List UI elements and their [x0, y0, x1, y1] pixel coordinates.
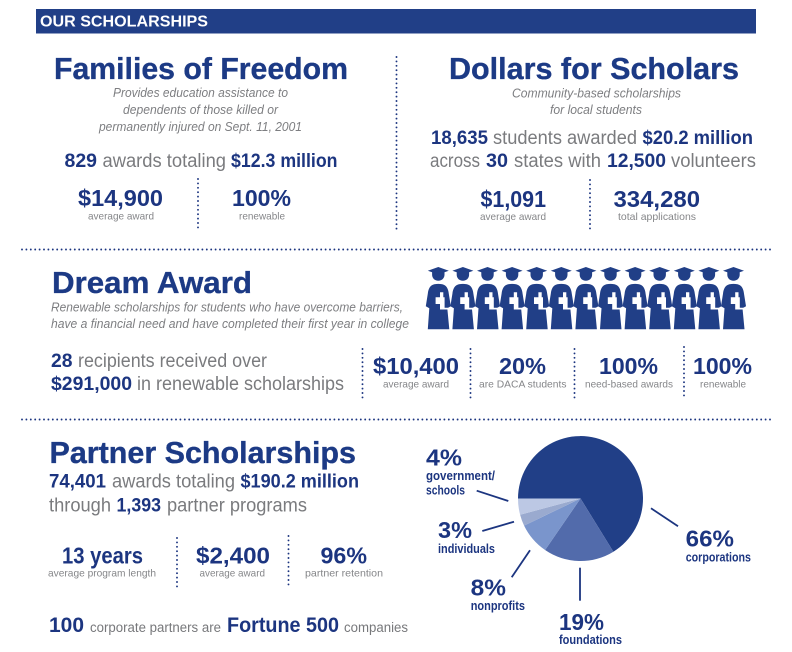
- pie label: 4% government/schools: 4%: [426, 445, 462, 471]
- stat lines: recipients: $291,000: [51, 374, 132, 395]
- stat lines: students and volunteers: students awarded: [493, 128, 637, 149]
- stat lines: partner awards: awards totaling: [112, 472, 235, 493]
- stat: partner retention: partner retention: [305, 568, 383, 580]
- stat: renewable: 100%: [693, 353, 752, 379]
- stat: total applications: 334,280: [614, 186, 700, 212]
- stat lines: partner awards: [49, 472, 359, 517]
- stat lines: partner awards: 1,393: [116, 496, 161, 517]
- callout: fortune 500 partners: corporate partners are: [90, 620, 221, 635]
- stat: need-based awards: need-based awards: [585, 379, 673, 391]
- heading: dollars for scholars: Dollars for Scholars: [449, 51, 739, 86]
- stat: need-based awards: 100%: [599, 353, 658, 379]
- callout: fortune 500 partners: 100: [49, 614, 84, 637]
- stat lines: students and volunteers: 18,635: [431, 128, 488, 149]
- description: dream award: [51, 300, 409, 331]
- stat: renewable: 100%: [232, 185, 291, 211]
- stat lines: recipients: recipients received over: [78, 351, 268, 372]
- stat: partner retention: [305, 542, 383, 580]
- pie label: 4% government/schools: schools: [426, 484, 465, 498]
- stat lines: partner awards: 74,401: [49, 472, 106, 493]
- stat line: 829 awards: [64, 151, 338, 172]
- stat lines: partner awards: through: [49, 496, 111, 517]
- stat lines: students and volunteers: [430, 128, 756, 172]
- pie label: 3% individuals: individuals: [438, 542, 495, 556]
- pie label: 66% corporations: [651, 508, 751, 564]
- panel: partner scholarships: [48, 435, 408, 637]
- panel: dream award: [51, 265, 752, 401]
- pie label: 3% individuals: 3%: [438, 517, 472, 543]
- stat: average program length: average program length: [48, 568, 156, 580]
- header bar: our scholarships: OUR SCHOLARSHIPS: [40, 14, 208, 31]
- description: families of freedom: permanently injured on Sept. 11, 2001: [98, 119, 302, 134]
- stat lines: partner awards: partner programs: [167, 496, 307, 517]
- pie label: 4% government/schools: [426, 445, 508, 501]
- pie label: 8% nonprofits: 8%: [471, 575, 506, 601]
- description: dream award: Renewable scholarships for students who have overcome barriers,: [51, 300, 403, 315]
- stat: need-based awards: [585, 353, 673, 391]
- heading: dream award: Dream Award: [52, 265, 252, 300]
- stat: renewable: renewable: [239, 211, 285, 223]
- description: dream award: have a financial need and have completed their first year in college: [51, 316, 409, 331]
- stat: average program length: 13 years: [62, 542, 143, 568]
- heading: families of freedom: Families of Freedom: [54, 51, 348, 86]
- pie label: 19% foundations: foundations: [559, 633, 622, 647]
- stat lines: partner awards: $190.2 million: [240, 472, 359, 493]
- pie label: 66% corporations: 66%: [686, 526, 734, 552]
- stat: average award: average award: [480, 211, 546, 223]
- description: dollars for scholars: for local students: [550, 102, 642, 117]
- stat: total applications: total applications: [618, 211, 696, 223]
- stat: total applications: [614, 186, 700, 223]
- heading: partner scholarships: Partner Scholarships: [50, 435, 356, 470]
- pie label: 19% foundations: 19%: [559, 609, 604, 635]
- stat lines: students and volunteers: $20.2 million: [642, 128, 753, 149]
- pie label: 8% nonprofits: [471, 550, 530, 613]
- description: dollars for scholars: Community-based scholarships: [512, 86, 681, 100]
- callout: fortune 500 partners: companies: [344, 620, 408, 635]
- icon: row of thirteen graduates: [426, 267, 746, 329]
- stat: average award: average award: [200, 568, 265, 580]
- stat: average award: average award: [88, 211, 154, 223]
- stat lines: recipients: in renewable scholarships: [137, 374, 344, 395]
- stat: average award: $14,900: [78, 185, 163, 211]
- stat lines: recipients: 28: [51, 351, 72, 372]
- stat: daca students: 20%: [499, 353, 546, 379]
- stat: partner retention: 96%: [320, 542, 367, 568]
- pie chart: partner types: [518, 436, 643, 561]
- description: families of freedom: dependents of those killed or: [123, 102, 279, 117]
- stat: average award: $2,400: [196, 542, 270, 568]
- stat: average program length: [48, 542, 156, 580]
- stat line: 829 awards: 829: [64, 151, 97, 172]
- callout: fortune 500 partners: [49, 614, 408, 637]
- pie label: 66% corporations: corporations: [686, 550, 751, 564]
- stat: average award: [373, 353, 459, 391]
- description: families of freedom: Provides education assistance to: [113, 85, 288, 100]
- stat lines: students and volunteers: 12,500: [607, 151, 666, 172]
- stat lines: students and volunteers: states with: [514, 151, 601, 172]
- panel: families of freedom: [54, 51, 348, 231]
- description: dollars for scholars: [512, 86, 681, 117]
- stat line: 829 awards: $12.3 million: [231, 151, 338, 172]
- description: families of freedom: [98, 85, 302, 134]
- stat: daca students: are DACA students: [479, 379, 566, 391]
- stat: average award: [480, 186, 546, 223]
- stat: renewable: renewable: [700, 379, 746, 391]
- stat: average award: $1,091: [480, 186, 546, 212]
- pie label: 19% foundations: [559, 568, 622, 647]
- stat line: 829 awards: awards totaling: [102, 151, 226, 172]
- stat: average award: $10,400: [373, 353, 459, 379]
- stat: average award: average award: [383, 379, 449, 391]
- callout: fortune 500 partners: Fortune 500: [227, 614, 339, 637]
- panel: dollars for scholars: [430, 51, 756, 232]
- pie label: 8% nonprofits: nonprofits: [471, 599, 525, 613]
- stat: renewable: [232, 185, 291, 223]
- stat: average award: [196, 542, 270, 580]
- stat lines: recipients: [51, 351, 344, 395]
- stat lines: students and volunteers: across: [430, 151, 480, 172]
- stat: renewable: [693, 353, 752, 391]
- pie label: 4% government/schools: government/: [426, 469, 495, 483]
- stat lines: students and volunteers: 30: [486, 151, 508, 172]
- pie label: 3% individuals: [438, 517, 514, 556]
- stat: daca students: [479, 353, 566, 391]
- stat lines: students and volunteers: volunteers: [671, 151, 756, 172]
- header bar: our scholarships: [36, 9, 756, 34]
- stat: average award: [78, 185, 163, 223]
